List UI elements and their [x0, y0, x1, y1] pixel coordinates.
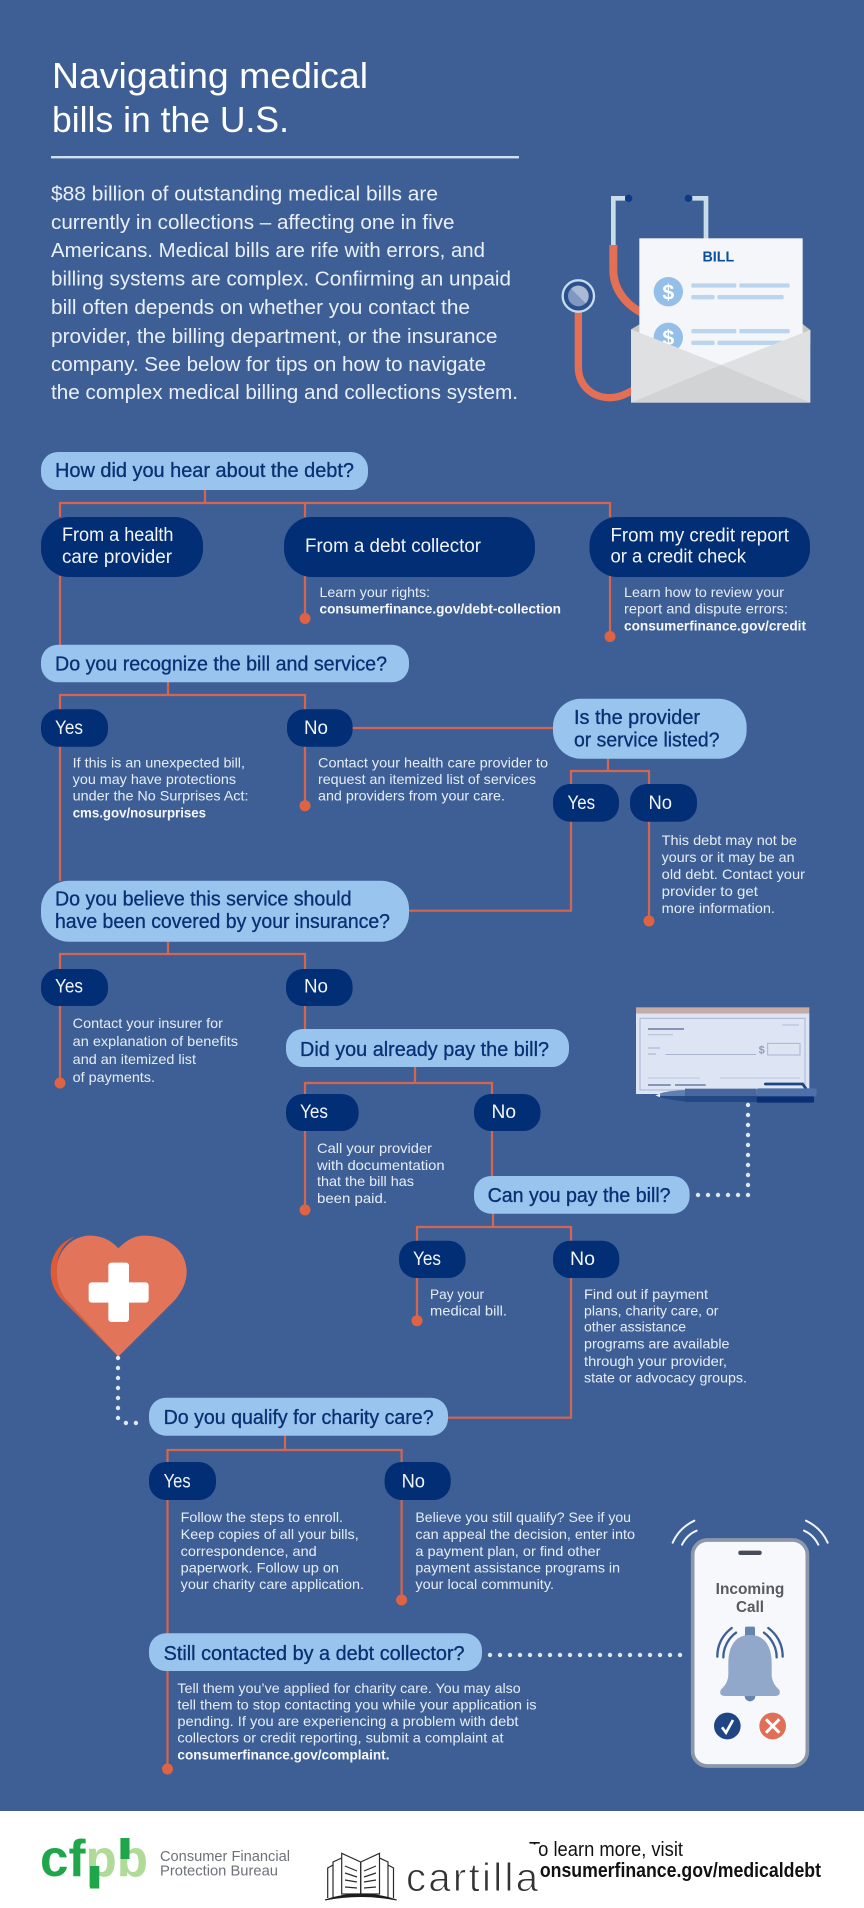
icon: phone with incoming call: Incoming — [716, 1581, 784, 1598]
footer call to action — [529, 1839, 821, 1882]
answer: yes, contact insurer: Contact your insurer for — [73, 1015, 223, 1031]
connector: already paid to yes and no — [305, 1067, 492, 1095]
answer: yes, enroll: paperwork. Follow up on — [181, 1560, 339, 1576]
cfpb logo: Consumer Financial — [160, 1849, 290, 1865]
question: is the provider listed — [553, 699, 747, 759]
connector: insurance question to yes and no — [60, 941, 305, 969]
answer: insurance no — [286, 969, 353, 1006]
cfpb logo — [40, 1830, 290, 1888]
footer call to action: To learn more, visit — [529, 1839, 683, 1861]
intro paragraph: company. See below for tips on how to navigate — [51, 353, 486, 376]
title rule — [51, 156, 519, 158]
intro paragraph — [51, 182, 518, 404]
answer: yes, unexpected bill — [41, 709, 248, 881]
answer: yes, call provider: that the bill has — [317, 1173, 414, 1189]
question: is the provider listed: or service listed? — [574, 730, 720, 752]
answer: provider listed no: provider to get — [662, 883, 758, 899]
answer: from my credit report: Learn how to review your — [624, 584, 784, 600]
answer: provider listed no: more information. — [662, 900, 775, 916]
answer: yes, contact insurer: and an itemized list — [73, 1051, 196, 1067]
connector: can you pay to yes and no — [417, 1213, 571, 1241]
illustration: check and pen — [636, 1007, 817, 1103]
answer: already paid no — [474, 1094, 540, 1131]
answer: no, find payment plans: state or advocacy groups. — [584, 1370, 747, 1386]
connector: provider listed yes to insurance question — [408, 821, 571, 911]
answer: already paid no: No — [492, 1102, 516, 1123]
cfpb logo: cfpb — [40, 1830, 148, 1888]
answer: yes, unexpected bill: If this is an unexpected bill, — [73, 754, 245, 770]
answer: from my credit report: report and dispute errors: — [624, 600, 788, 616]
answer: no, appeal: No — [402, 1472, 425, 1493]
connector: health care provider to next question — [59, 576, 61, 645]
connector: charity care to yes and no — [168, 1435, 402, 1463]
intro paragraph: the complex medical billing and collections system. — [51, 381, 518, 404]
question: still contacted by a debt collector: Tell them you’ve applied for charity care. You may also — [177, 1680, 521, 1696]
intro paragraph: provider, the billing department, or the insurance — [51, 325, 498, 348]
answer: provider listed no: yours or it may be an — [662, 849, 794, 865]
cfpb logo: Protection Bureau — [160, 1864, 278, 1880]
answer: no, appeal: your local community. — [415, 1576, 554, 1592]
answer: yes, pay your bill — [399, 1241, 507, 1326]
answer: insurance no: No — [304, 977, 328, 998]
answer: no, appeal — [385, 1462, 635, 1606]
answer: yes, enroll: Follow the steps to enroll. — [181, 1509, 343, 1525]
answer: provider listed yes — [553, 784, 619, 822]
answer: no, appeal: a payment plan, or find other — [415, 1543, 601, 1559]
answer: no, contact provider: Contact your health care provider to — [318, 754, 548, 770]
answer: yes, contact insurer: Yes — [55, 977, 83, 998]
answer: yes, contact insurer: an explanation of benefits — [73, 1033, 238, 1049]
answer: from a debt collector — [284, 517, 561, 624]
answer: no, contact provider: request an itemized list of services — [318, 771, 536, 787]
question: still contacted by a debt collector — [149, 1633, 537, 1774]
footer band — [0, 1811, 864, 1908]
illustration: stethoscope with bill in envelope: $ — [662, 280, 674, 304]
answer: no, find payment plans: plans, charity care, or — [584, 1303, 719, 1319]
answer: yes, call provider: Call your provider — [317, 1140, 432, 1156]
answer: from a health care provider: From a health — [62, 525, 174, 546]
connector: first question to its answers — [60, 490, 610, 517]
answer: yes, unexpected bill: Yes — [55, 718, 83, 739]
answer: from a debt collector: From a debt collector — [305, 536, 482, 557]
question: still contacted by a debt collector: pending. If you are experiencing a problem with debt — [177, 1713, 519, 1729]
answer: no, contact provider: and providers from your care. — [318, 788, 505, 804]
answer: provider listed no: old debt. Contact your — [662, 866, 805, 882]
dotted link: check to can you pay — [697, 1105, 748, 1195]
answer: from a debt collector: Learn your rights: — [320, 584, 430, 600]
answer: from a health care provider: care provider — [62, 547, 173, 568]
question: qualify for charity care: Do you qualify for charity care? — [164, 1407, 434, 1429]
illustration: check and pen: $ — [759, 1044, 765, 1056]
answer: yes, contact insurer: of payments. — [73, 1069, 155, 1085]
dotted link: debt collector to phone — [490, 1653, 690, 1657]
answer: yes, call provider: with documentation — [316, 1157, 445, 1173]
icon: phone with incoming call: Call — [736, 1599, 764, 1616]
intro paragraph: Americans. Medical bills are rife with errors, and — [51, 239, 485, 262]
cartilla logo: cartilla — [406, 1856, 539, 1900]
answer: yes, enroll: Keep copies of all your bills, — [181, 1526, 359, 1542]
answer: from my credit report: or a credit check — [610, 546, 746, 568]
footer call to action: consumerfinance.gov/medicaldebt — [530, 1860, 821, 1882]
answer: no, find payment plans: No — [570, 1249, 595, 1270]
answer: yes, enroll: Yes — [164, 1472, 191, 1493]
question: do you recognize the bill — [41, 645, 409, 682]
answer: provider listed yes: Yes — [568, 793, 595, 814]
answer: yes, pay your bill: Pay your — [430, 1286, 484, 1302]
answer: from my credit report: From my credit report — [610, 526, 790, 546]
answer: yes, enroll: correspondence, and — [181, 1543, 317, 1559]
answer: no, find payment plans — [447, 1241, 747, 1418]
question: how did you hear: How did you hear about the debt? — [55, 460, 354, 482]
answer: yes, unexpected bill: you may have protections — [73, 771, 236, 787]
answer: provider listed no: This debt may not be — [662, 832, 797, 848]
illustration: stethoscope with bill in envelope: BILL — [702, 250, 734, 266]
answer: provider listed no: No — [648, 793, 672, 814]
question: is the provider listed: Is the provider — [574, 707, 700, 729]
illustration: stethoscope with bill in envelope — [563, 195, 810, 403]
answer: from my credit report — [590, 517, 810, 642]
answer: yes, enroll: your charity care application. — [181, 1576, 364, 1592]
question: still contacted by a debt collector: collectors or credit reporting, submit a complaint at — [177, 1730, 504, 1746]
answer: provider listed no — [630, 784, 805, 926]
question: covered by insurance — [41, 881, 409, 942]
question: did you already pay — [286, 1029, 569, 1067]
answer: yes, call provider: been paid. — [317, 1190, 387, 1206]
connector: recognize question to yes and no — [60, 682, 305, 710]
title — [52, 55, 368, 140]
title: Navigating medical — [52, 55, 368, 96]
icon: heart with cross — [51, 1236, 187, 1357]
intro paragraph: bill often depends on whether you contact the — [51, 296, 470, 319]
question: how did you hear — [41, 452, 368, 490]
answer: from a health care provider — [41, 517, 203, 577]
answer: from my credit report: consumerfinance.gov/credit — [624, 618, 806, 634]
question: can you pay the bill — [474, 1176, 690, 1214]
answer: yes, unexpected bill: under the No Surprises Act: — [73, 788, 248, 804]
question: covered by insurance: Do you believe this service should — [55, 889, 352, 911]
answer: no, find payment plans: through your provider, — [584, 1353, 727, 1369]
connector: insurance no to pay question — [304, 1005, 306, 1029]
intro paragraph: billing systems are complex. Confirming an unpaid — [51, 268, 511, 290]
question: can you pay the bill: Can you pay the bill? — [488, 1185, 671, 1207]
intro paragraph: $88 billion of outstanding medical bills are — [51, 182, 438, 206]
answer: from a debt collector: consumerfinance.gov/debt-collection — [320, 600, 561, 616]
cartilla logo — [320, 1844, 539, 1908]
question: do you recognize the bill: Do you recognize the bill and service? — [55, 654, 387, 676]
question: still contacted by a debt collector: Still contacted by a debt collector? — [164, 1643, 465, 1665]
dotted link: heart to charity care — [118, 1358, 145, 1423]
intro paragraph: currently in collections – affecting one in five — [51, 211, 454, 234]
answer: no, appeal: can appeal the decision, enter into — [415, 1526, 635, 1542]
question: covered by insurance: have been covered by your insurance? — [55, 911, 390, 933]
answer: no, contact provider: No — [304, 718, 328, 739]
answer: no, appeal: Believe you still qualify? See if you — [415, 1509, 631, 1525]
question: still contacted by a debt collector: consumerfinance.gov/complaint. — [177, 1746, 390, 1762]
answer: yes, enroll — [149, 1462, 364, 1634]
answer: yes, pay your bill: Yes — [413, 1249, 441, 1270]
question: still contacted by a debt collector: tell them to stop contacting you while your application is — [177, 1697, 537, 1713]
answer: yes, pay your bill: medical bill. — [430, 1303, 507, 1319]
connector: provider listed to yes and no — [571, 758, 649, 785]
title: bills in the U.S. — [52, 99, 289, 140]
answer: no, find payment plans: Find out if payment — [584, 1286, 708, 1302]
answer: no, find payment plans: programs are available — [584, 1336, 730, 1352]
answer: yes, contact insurer — [41, 969, 238, 1088]
answer: yes, call provider — [286, 1094, 445, 1216]
answer: no, find payment plans: other assistance — [584, 1319, 686, 1335]
illustration: stethoscope with bill in envelope: $ — [662, 326, 674, 350]
question: did you already pay: Did you already pay the bill? — [300, 1039, 549, 1061]
connector: already paid no to can you pay — [491, 1130, 493, 1176]
answer: yes, unexpected bill: cms.gov/nosurprises — [73, 805, 206, 821]
answer: yes, call provider: Yes — [300, 1102, 328, 1123]
question: qualify for charity care — [149, 1398, 448, 1436]
answer: no, appeal: payment assistance programs in — [415, 1560, 620, 1576]
icon: phone with incoming call — [673, 1521, 828, 1766]
answer: no, contact provider — [287, 709, 553, 811]
